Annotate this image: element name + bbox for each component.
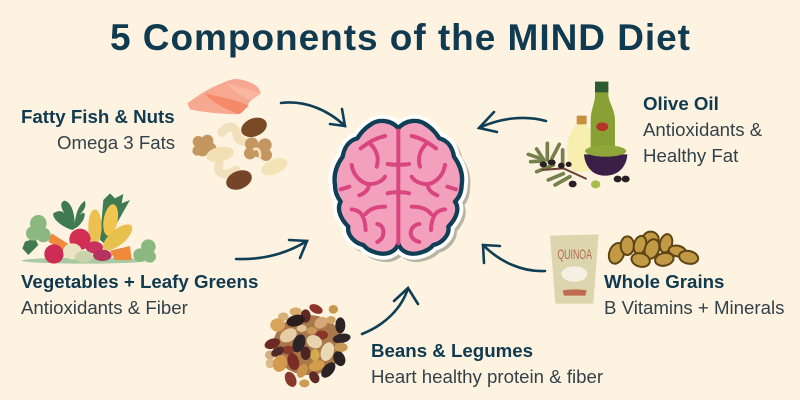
arrow: fish and nuts to brain <box>281 102 345 126</box>
title: 5 Components of the MIND Diet <box>110 17 690 58</box>
text: Olive Oil <box>643 93 763 166</box>
icon: brain <box>335 121 465 257</box>
icon: vegetables <box>22 193 156 264</box>
text: Beans & Legumes: Heart healthy protein & fiber <box>371 366 603 387</box>
text: Vegetables + Leafy Greens: Vegetables + Leafy Greens <box>21 271 258 292</box>
text: Whole Grains <box>604 271 784 318</box>
text: Vegetables + Leafy Greens <box>21 271 258 318</box>
text: Vegetables + Leafy Greens: Antioxidants & Fiber <box>21 297 188 318</box>
icon: salmon fillet <box>187 79 261 114</box>
arrow: whole grains to brain <box>483 245 545 271</box>
arrow: olive oil to brain <box>479 112 546 132</box>
text: Fatty Fish & Nuts: Omega 3 Fats <box>57 132 175 153</box>
icon: beans <box>263 302 351 389</box>
text: Olive Oil: Olive Oil <box>643 93 719 114</box>
arrow: beans to brain <box>362 288 418 334</box>
text: Whole Grains: Whole Grains <box>604 271 724 292</box>
text: Whole Grains: B Vitamins + Minerals <box>604 297 784 318</box>
icon: mixed nuts <box>192 114 290 193</box>
icon: olive oil <box>528 82 630 188</box>
text: Olive Oil: Antioxidants & <box>643 119 763 140</box>
text: Beans & Legumes <box>371 340 603 387</box>
icon: quinoa bag: QUINOA <box>557 246 592 262</box>
text: Fatty Fish & Nuts <box>21 106 175 153</box>
text: Beans & Legumes: Beans & Legumes <box>371 340 533 361</box>
arrow: vegetables to brain <box>236 240 307 259</box>
text: Olive Oil: Healthy Fat <box>643 145 739 166</box>
icon: quinoa bag <box>550 234 599 304</box>
text: Fatty Fish & Nuts: Fatty Fish & Nuts <box>21 106 175 127</box>
icon: whole grains <box>606 232 699 269</box>
